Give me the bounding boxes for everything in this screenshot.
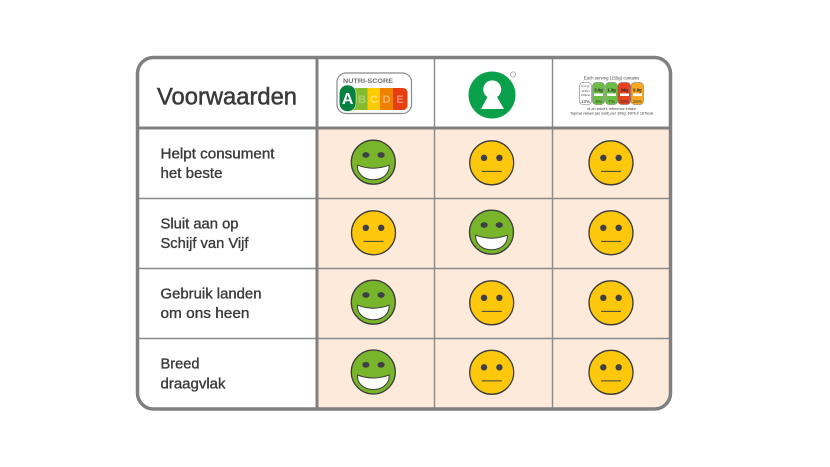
- icon: traffic light nutrition label: Typical values (as sold) per 100g: 697kJ/ 167kcal: [570, 112, 653, 116]
- icon: traffic light nutrition label: 0.9g: [633, 88, 642, 92]
- row label: Sluit aan op Schijf van Vijf: Sluit aan op: [160, 216, 238, 232]
- row label: Helpt consument het beste: Helpt consument: [160, 146, 274, 162]
- icon: Nutri-Score logo: NUTRI-SCORE: [343, 78, 393, 85]
- icon: traffic light nutrition label: [570, 76, 653, 116]
- smiley row 2: [352, 210, 633, 255]
- row label: Gebruik landen om ons heen: Gebruik landen: [160, 286, 262, 302]
- icon: Nutri-Score logo: B: [358, 94, 366, 106]
- row label: Breed draagvlak: [160, 356, 226, 392]
- smiley row 3: [351, 280, 633, 325]
- smiley row 1: [351, 140, 633, 185]
- row label: Gebruik landen om ons heen: om ons heen: [160, 306, 250, 322]
- icon: traffic light nutrition label: 15%: [633, 99, 642, 104]
- title: Voorwaarden: [157, 84, 297, 110]
- icon: traffic light nutrition label: of an adult's reference intake: [587, 107, 636, 111]
- row label: Helpt consument het beste: [160, 146, 274, 182]
- table panel: [138, 58, 670, 409]
- icon: Nutri-Score logo: D: [383, 94, 391, 106]
- icon: traffic light nutrition label: 7%: [608, 99, 615, 104]
- icon: traffic light nutrition label: 34g: [621, 88, 628, 92]
- icon: Nutri-Score logo: E: [396, 94, 404, 106]
- icon: traffic light nutrition label: Energy: [581, 84, 590, 88]
- icon: Nutri-Score logo: C: [370, 94, 378, 106]
- row label: Helpt consument het beste: het beste: [160, 166, 222, 182]
- icon: traffic light nutrition label: 250kcal: [581, 93, 590, 97]
- icon: traffic light nutrition label: Each serving (150g) contains: [584, 76, 639, 80]
- icon: traffic light nutrition label: 1046kJ: [581, 89, 590, 93]
- icon: traffic light nutrition label: 3.0g: [594, 88, 603, 92]
- smiley row 4: [351, 350, 633, 394]
- icon: Nutri-Score logo: [337, 73, 412, 114]
- icon: traffic light nutrition label: 1.3g: [607, 88, 616, 92]
- icon: Nutri-Score logo: A: [342, 91, 354, 108]
- row label: Sluit aan op Schijf van Vijf: Schijf van Vijf: [160, 236, 249, 252]
- icon: traffic light nutrition label: 38%: [620, 99, 629, 104]
- icon: traffic light nutrition label: 13%: [581, 99, 590, 104]
- row label: Breed draagvlak: Breed: [160, 356, 200, 372]
- score cells background: [317, 129, 670, 408]
- row label: Gebruik landen om ons heen: [160, 286, 262, 322]
- icon: traffic light nutrition label: 4%: [595, 99, 602, 104]
- row label: Sluit aan op Schijf van Vijf: [160, 216, 249, 252]
- icon: Keyhole logo: [468, 72, 516, 118]
- row label: Breed draagvlak: draagvlak: [160, 376, 226, 392]
